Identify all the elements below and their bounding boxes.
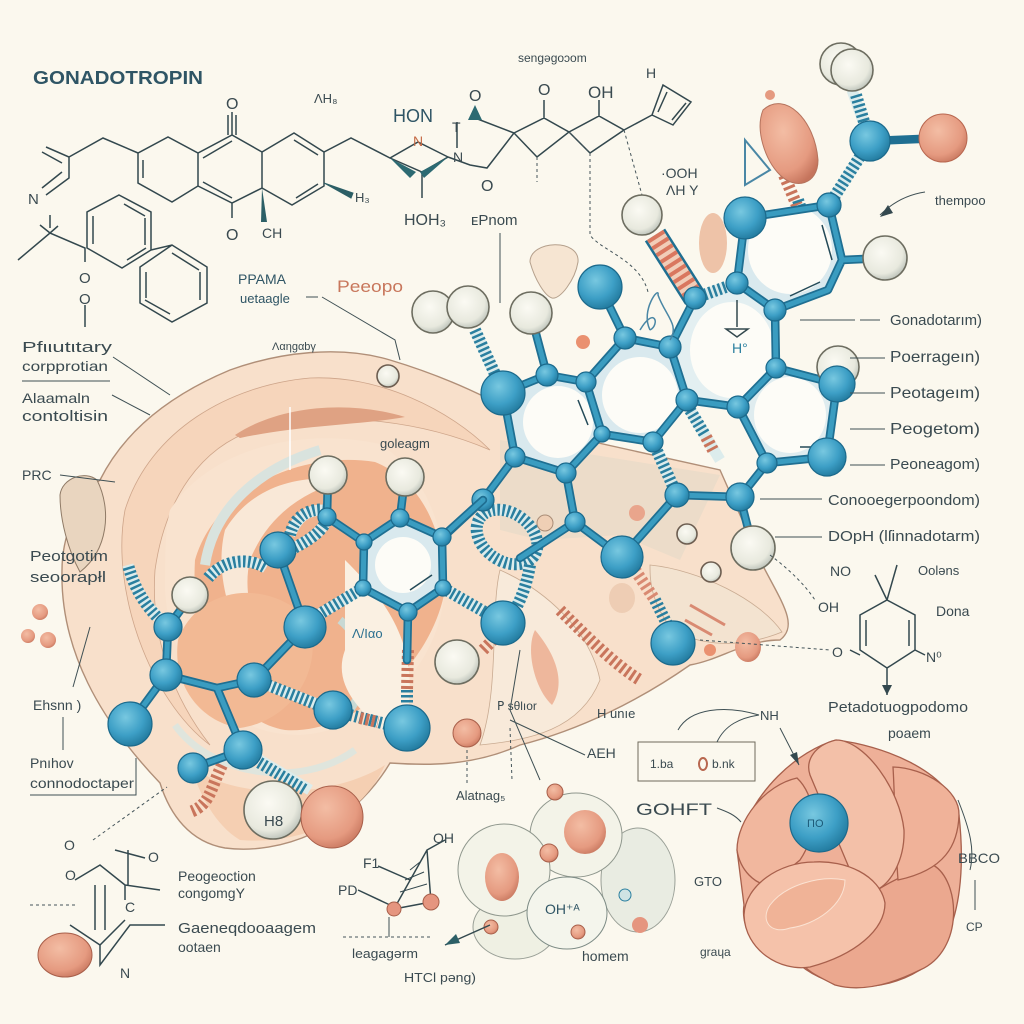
chemical structure: top formula chain: ᴇPnom [471,212,518,229]
chemical structure: top formula chain: O [226,96,238,113]
center and bottom labels: GOHFT [636,800,712,819]
white atoms upper [412,43,907,570]
center and bottom labels: HTCl pəng) [404,970,476,985]
salmon atom lower [301,786,363,848]
bottom center cell cluster [458,784,675,964]
small formula right: Ooləns [918,563,960,578]
small formula right: poaem [888,725,931,741]
chemical structure: bottom-left: O [64,837,75,853]
data box: b.nk [712,757,736,771]
chemical structure: bottom-left: O [148,849,159,865]
left labels: corpprotian [22,358,108,374]
blue atoms upper [472,121,890,665]
center and bottom labels: leagaɡərm [352,946,418,961]
chemical structure: bottom-left: C [125,899,135,915]
bottom center cell cluster: homem [582,948,629,964]
lower molecule: Λ/Ιαο [352,626,383,641]
lower molecule [108,456,525,848]
left labels: Peeopo [337,277,403,296]
center and bottom labels: AEH [587,745,616,761]
center and bottom labels: Gaeneqdooaagem [178,920,316,937]
right labels: Poerrageın) [890,349,980,366]
H label in ring [726,300,748,356]
chemical structure: top formula chain: O [538,82,550,99]
ring interiors [503,205,842,473]
small formula right: Dona [936,603,970,619]
small formula right: OH [818,599,839,615]
small formula right: Petadotuogpodomo [828,699,968,716]
helical stripes upper [466,90,870,680]
chemical structure: top formula chain: OH [588,83,614,102]
title: GONADOTROPIN [33,68,203,88]
right labels: Gonadotarım) [890,312,982,329]
chemical structure: top formula chain: CH [262,225,282,241]
chemical structure: top formula chain: H₃ [355,190,370,205]
bottom center cell cluster: OH⁺ᴬ [545,901,580,917]
center and bottom labels: ɡraɥa [700,945,731,959]
left labels [22,271,430,840]
small formula right: N⁰ [926,649,942,665]
chemical structure: bottom-left: O [65,867,76,883]
organ: pituitary body [60,352,788,849]
small triangular formula bottom center: OH [433,830,454,846]
right labels: thempoo [935,193,986,208]
right labels: Conooegerpoondom) [828,492,980,509]
center and bottom labels: GTO [694,874,722,889]
chemical structure: bottom-left [30,837,165,981]
left labels: Pfιιutιtary [22,339,113,356]
blue atom in organ: ΠΟ [807,818,824,830]
chemical structure: top formula chain: ѕengəɡoɔom [518,51,587,65]
blue atom in organ [790,794,848,852]
organ: bottom-right peach mass [737,740,961,988]
chemical structure: top formula chain: HON [393,106,433,126]
chemical structure: top formula chain: N [453,149,463,165]
upper molecule [412,43,967,680]
small formula right [818,563,970,741]
data box: 1.ba [650,757,674,771]
right labels: Peotageım) [890,385,980,402]
center and bottom labels: Peogeoction [178,868,256,884]
center and bottom labels: CP [966,920,983,934]
center and bottom labels: BBCO [958,850,1000,866]
left labels: Peotgotim [30,548,108,565]
left labels: connodoctaper [30,775,134,791]
left labels: PPAMA [238,271,287,287]
chemical structure: benzene rings left [18,195,207,327]
chemical structure: top formula chain: N [413,133,423,149]
center and bottom labels: Alatnaɡ₅ [456,788,505,803]
data box [638,742,755,781]
right labels: Peoneagom) [890,456,980,473]
chemical structure: top formula chain: O [226,227,238,244]
left labels: Λαηɡαbγ [272,341,316,353]
left labels: Pnıhov [30,755,74,771]
small formula right: O [832,644,843,660]
center and bottom labels: NH [760,708,779,723]
left labels: PRC [22,467,52,483]
helical stripes lower [128,510,503,812]
salmon atom [38,933,92,977]
H label in ring: H° [732,340,748,356]
center and bottom labels: ꓑ sθlıor [497,699,537,713]
chemical structure: top formula chain [28,51,699,303]
small decorative cells and atoms [21,90,818,747]
center and bottom labels: PD [338,882,357,898]
left labels: contoltisin [22,408,108,425]
right labels: Peogetom) [890,421,980,438]
blue atoms lower [108,508,525,783]
lower molecule: H8 [264,813,283,830]
chemical structure: top formula chain: HOH₃ [404,212,446,229]
chemical structure: top formula chain: N [28,191,39,208]
center and bottom labels: ootaen [178,939,221,955]
chemical structure: top formula chain: ·OOH [661,165,698,181]
left labels: seoorapłl [30,569,106,586]
chemical structure: bottom-left: N [120,965,130,981]
chemical structure: top formula chain: ΛH₈ [314,91,337,106]
chemical structure: top formula chain: ΛH Y [666,182,699,198]
chemical structure: top formula chain: O [481,178,493,195]
center and bottom labels: H unıe [597,706,635,721]
chemical structure: top formula chain: O [469,88,481,105]
left labels: ɡoleagm [380,436,430,451]
center and bottom labels: F1 [363,855,380,871]
left labels: Alaamaln [22,390,90,406]
left labels: uetaagle [240,291,290,306]
chemical structure: top formula chain: T [452,119,461,135]
chemical structure: benzene rings left: O [79,270,91,287]
right labels [760,192,986,600]
salmon atom upper [870,138,943,141]
chemical structure: top formula chain: H [646,65,656,81]
center and bottom labels [178,640,1000,985]
white atoms lower [172,456,479,839]
center and bottom labels: congomgY [178,885,246,901]
left labels: Ehsnn ) [33,697,81,713]
small triangular formula bottom center [343,830,490,945]
right labels: DOpH (lſinnadotarm) [828,528,980,545]
small formula right: NO [830,563,851,579]
chemical structure: benzene rings left: O [79,291,91,308]
